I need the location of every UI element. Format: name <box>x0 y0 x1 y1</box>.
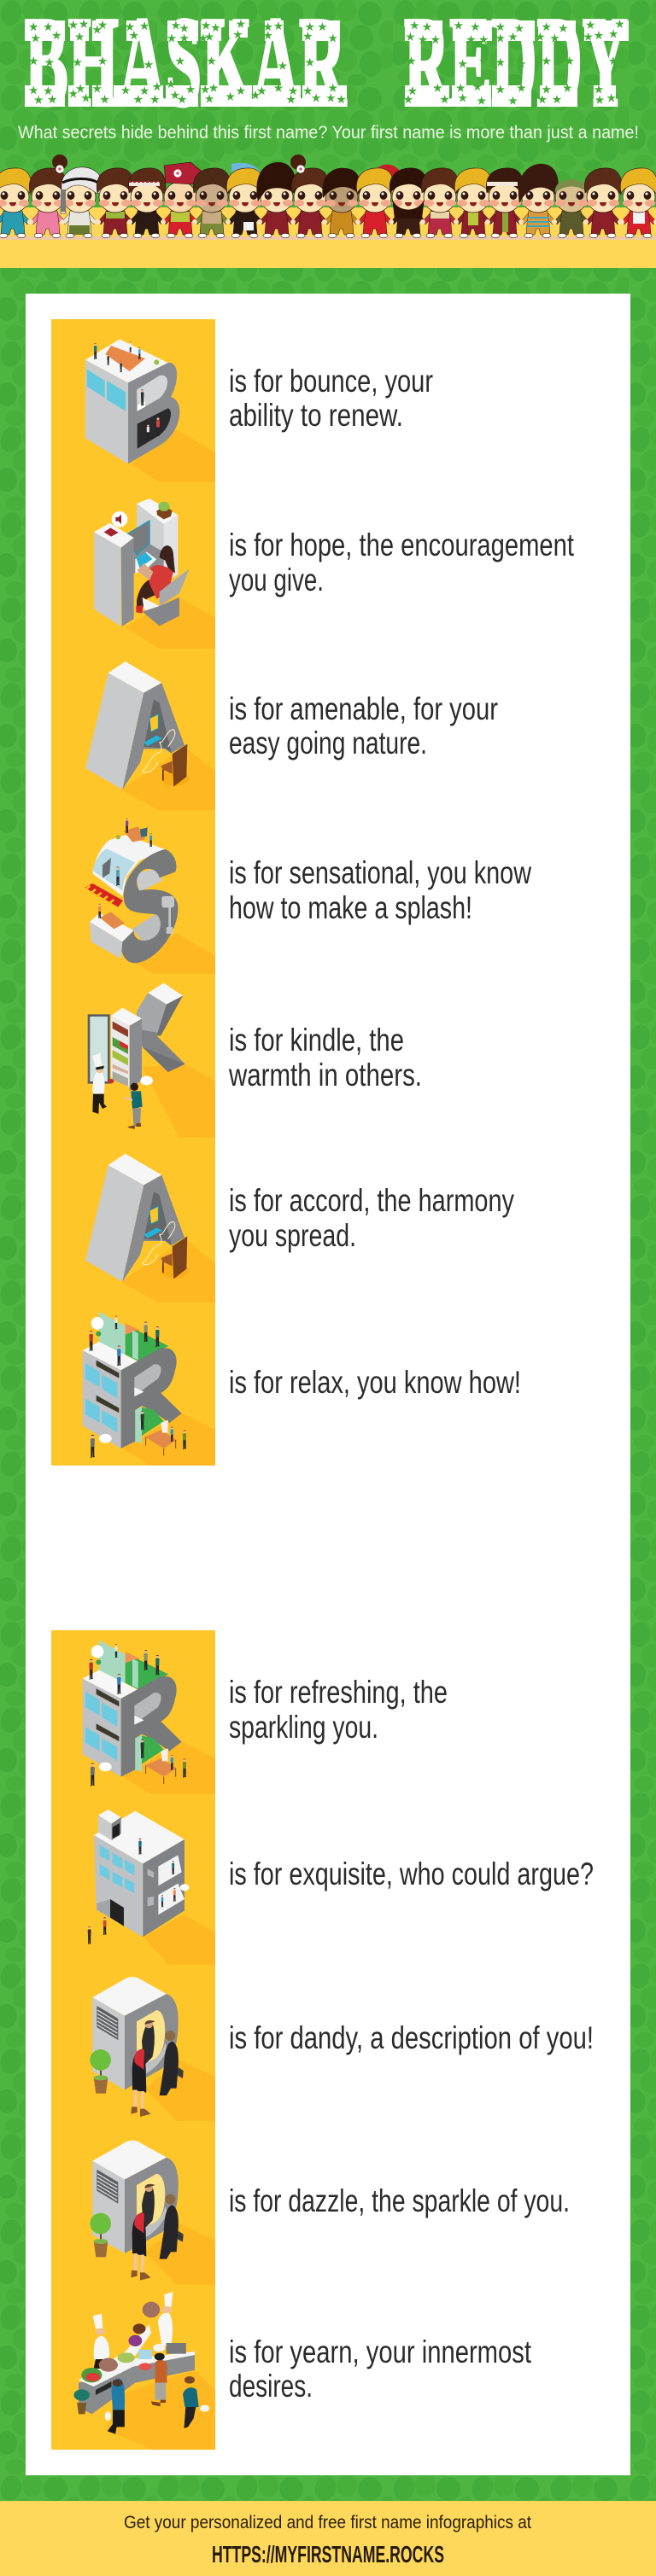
panel: first name letters column <box>51 319 215 1466</box>
row: last name letter R <box>83 1641 448 1794</box>
text: A line: easy going nature. <box>229 726 427 761</box>
row: letter D <box>90 1977 594 2121</box>
text: K line: is for kindle, the <box>229 1023 404 1058</box>
icon: isometric letter K with fridge and chef <box>88 983 215 1138</box>
row: second letter A <box>85 1154 514 1303</box>
footer link: HTTPS://MYFIRSTNAME.ROCKS <box>212 2541 444 2567</box>
row: letter R <box>83 1312 521 1466</box>
text: H line: is for hope, the encouragement <box>229 527 575 562</box>
icon: isometric letter Y buffet with chefs <box>73 2292 215 2450</box>
text: H line: you give. <box>229 562 324 597</box>
row: letter S <box>85 819 531 974</box>
icon: isometric letter A with chair <box>85 1154 215 1303</box>
icon: isometric letter R office building <box>83 1641 215 1794</box>
icon: isometric letter B building <box>85 339 215 482</box>
text: yearn line: desires. <box>229 2369 313 2404</box>
text: refreshing line: sparkling you. <box>229 1710 378 1745</box>
row: letter K <box>88 983 422 1138</box>
text: A line: is for amenable, for your <box>229 691 498 726</box>
text: yearn line: is for yearn, your innermost <box>229 2334 532 2369</box>
icon: isometric letter H with woman at desk <box>94 498 215 649</box>
text: yearn line <box>229 2334 532 2404</box>
panel: last name letters column <box>51 1630 215 2450</box>
footer text: Get your personalized and free first name infographics at <box>124 2513 531 2532</box>
text: accord line <box>229 1183 514 1253</box>
text: S line: is for sensational, you know <box>229 855 531 890</box>
text: refreshing line <box>229 1675 448 1745</box>
footer band <box>0 2501 656 2576</box>
icon: isometric letter S with awning and desks <box>85 819 215 974</box>
text: K line: warmth in others. <box>228 1058 422 1093</box>
icon: isometric letter R office building <box>83 1312 215 1466</box>
text: accord line: is for accord, the harmony <box>229 1183 514 1218</box>
icon: isometric letter D with people and plant <box>90 2141 215 2285</box>
icon: isometric letter A with chair <box>85 661 215 810</box>
banner: row of cartoon children in costumes <box>0 154 656 268</box>
text: B line <box>229 364 433 433</box>
text: S line <box>229 855 531 925</box>
row: letter A <box>85 661 498 810</box>
row: letter Y <box>73 2292 532 2450</box>
text: B line: ability to renew. <box>229 398 403 433</box>
text: relax line: is for relax, you know how! <box>229 1365 521 1400</box>
text: S line: how to make a splash! <box>229 890 472 925</box>
icon: isometric letter E apartment building <box>88 1810 215 1965</box>
row: second letter D <box>90 2141 570 2285</box>
row: letter E <box>88 1810 594 1965</box>
text: accord line: you spread. <box>229 1218 356 1253</box>
row: letter H <box>94 498 575 649</box>
text: A line <box>229 691 498 761</box>
text: K line <box>228 1023 422 1093</box>
panel: white letter panel <box>26 294 630 2475</box>
row: letter B <box>85 339 433 482</box>
text: refreshing line: is for refreshing, the <box>229 1675 448 1710</box>
text: H line <box>229 527 575 597</box>
icon: isometric letter D with people and plant <box>90 1977 215 2121</box>
text: B line: is for bounce, your <box>229 364 433 399</box>
